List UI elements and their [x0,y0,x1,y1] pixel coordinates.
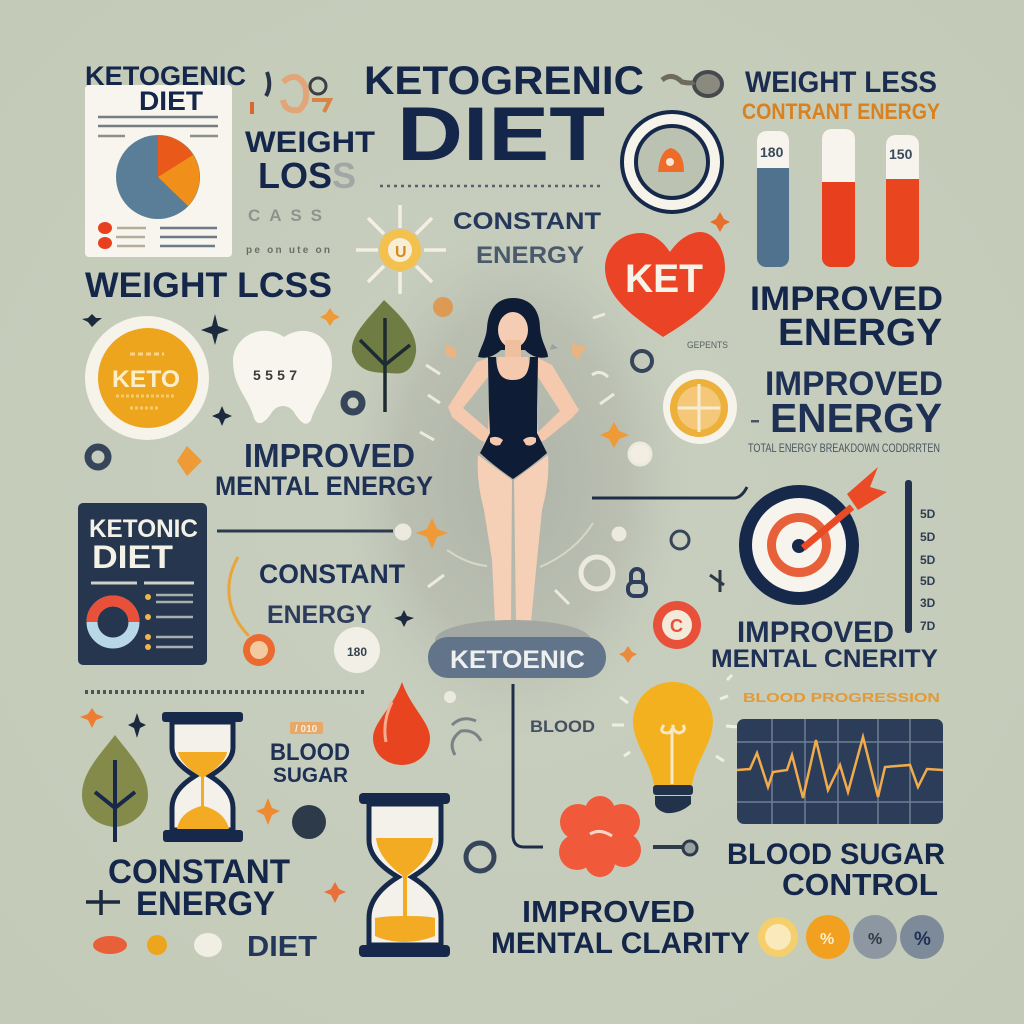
heading: improved mental clarity: IMPROVED [522,894,695,929]
heading: constant energy lower left: CONSTANT [108,853,290,891]
icon: hourglass large [359,793,450,957]
label: diet with small icons: DIET [247,931,317,963]
panel: ketonic diet dark card [78,503,207,665]
faded captions under weight loss: CASS [248,206,322,225]
title [364,59,644,177]
heading: weight loss top: WEIGHT [245,126,375,159]
heading: constant energy lower left [108,853,290,923]
heading: improved mental cnerity: IMPROVED [737,616,894,649]
heading: weight loss top [245,126,375,196]
heading: constant energy lower left: ENERGY [136,885,275,923]
heading: weight less constant energy: WEIGHT LESS [745,66,937,99]
decorative dotted line left [85,690,365,694]
heading: constant energy center: ENERGY [476,242,584,269]
icons: row of coins [758,915,944,959]
heading: constant energy mid-left [259,559,405,629]
heading: improved energy 2: ENERGY [770,395,942,441]
heading: blood sugar: BLOOD [270,739,350,766]
heading: improved energy 1: ENERGY [778,312,942,354]
heading: constant energy center [453,208,601,269]
caption under heart: GEPENTS [687,340,728,350]
scattered icons around figure [396,314,651,604]
heading: improved energy 2 [748,365,943,455]
icon: small orange ring and white circle [243,627,380,673]
icon: small key [653,841,697,855]
icon: heart ket [605,232,725,337]
icon: leaf lower left [82,735,148,842]
small icons mid right: C [670,616,683,636]
heading: weight less constant energy: CONTRANT ENERGY [742,99,940,124]
chart: test tube bars [757,129,919,267]
label: diet with small icons [93,931,317,963]
icon: target rings top right [622,112,722,212]
icon: sun: U [395,244,407,261]
heading: improved mental cnerity [711,616,938,673]
small icons mid right [628,569,724,649]
icon: hourglass small [162,712,243,842]
pedestal: ketoenic label [428,620,606,678]
icon: glasses blob [662,72,722,96]
icon: target with arrow [739,467,887,605]
icon: small dark rings [88,351,689,871]
chart: test tube bars: 150 [889,146,913,162]
scale: vertical axis: 5D [920,553,936,567]
heading: weight loss left: WEIGHT LCSS [85,266,332,305]
icon: tooth [233,331,332,424]
scale: vertical axis: 7D [920,619,936,633]
icon: blood drop [373,682,430,765]
heading: improved energy 1: IMPROVED [750,280,943,318]
connector line bottom center [513,684,543,847]
heading: improved mental energy: MENTAL ENERGY [215,471,433,501]
panel: ketogenic diet report card: KETOGENIC [85,61,246,91]
chart: test tube bars: 180 [760,144,784,160]
icon: small orange ring and white circle: 180 [347,645,367,659]
connector line center right [592,487,747,498]
heading: improved energy 1 [750,280,943,354]
icons: row of coins: % [868,931,882,948]
heading: blood sugar control: BLOOD SUGAR [727,838,945,871]
figure: woman in swimsuit [448,298,579,631]
icon: heart ket: KET [625,257,703,301]
pedestal: ketoenic label: KETOENIC [450,646,585,674]
icon: sun [356,205,446,294]
scale: vertical axis [905,480,936,633]
icon: orange clock [663,370,737,444]
icon: orange sparkles [80,212,730,903]
heading: improved mental energy [215,437,433,501]
scale: vertical axis: 5D [920,507,936,521]
title: DIET [397,92,605,177]
icons: row of coins: % [820,931,834,948]
faded captions under weight loss [246,206,330,256]
icon: dark crosses [82,314,414,915]
heading: constant energy mid-left: CONSTANT [259,559,405,589]
dotted rule under title [380,185,600,187]
label: blood: BLOOD [530,717,595,736]
heading: improved energy 2: TOTAL ENERGY BREAKDOWN CODDRRTEN [748,441,940,455]
scale: vertical axis: 3D [920,596,936,610]
heading: blood sugar control: CONTROL [782,867,938,902]
heading: improved mental clarity [491,894,750,960]
icon: leaf [352,300,416,412]
panel: ketogenic diet report card: DIET [139,86,204,116]
chart: pulse line panel [737,719,943,824]
panel: ketonic diet dark card: KETONIC [89,515,198,543]
icon: keto coin [85,316,209,440]
icons: row of coins: % [914,929,931,950]
icon: light bulb [612,675,738,813]
heading: improved energy 2: IMPROVED [765,365,943,403]
icon: keto coin: KETO [112,366,180,393]
panel: ketogenic diet report card [85,61,246,257]
small icons top center [252,72,330,114]
scale: vertical axis: 5D [920,530,936,544]
heading: weight less constant energy [742,66,940,124]
heading: weight loss top: LOSS [258,155,356,196]
heading: blood dotted label: BLOOD PROGRESSION [743,690,940,705]
heading: improved mental clarity: MENTAL CLARITY [491,927,750,960]
heading: blood sugar: / 010 [295,724,318,735]
connector lines center left [217,531,393,636]
title: KETOGRENIC [364,59,644,103]
icon: tooth: 5557 [253,367,297,383]
heading: improved mental cnerity: MENTAL CNERITY [711,645,938,673]
heading: blood sugar: SUGAR [273,764,348,787]
heading: improved mental energy: IMPROVED [244,437,415,474]
icon: brain flower [559,796,641,877]
panel: ketonic diet dark card: DIET [92,539,174,575]
heading: blood sugar control [727,838,945,902]
scale: vertical axis: 5D [920,574,936,588]
icon: grey swirl [444,691,481,755]
icon: pale orange fragments [433,297,586,360]
heading: blood sugar [270,722,350,787]
heading: constant energy mid-left: ENERGY [267,601,372,629]
faded captions under weight loss: pe on ute on [246,245,330,256]
heading: constant energy center: CONSTANT [453,208,601,235]
